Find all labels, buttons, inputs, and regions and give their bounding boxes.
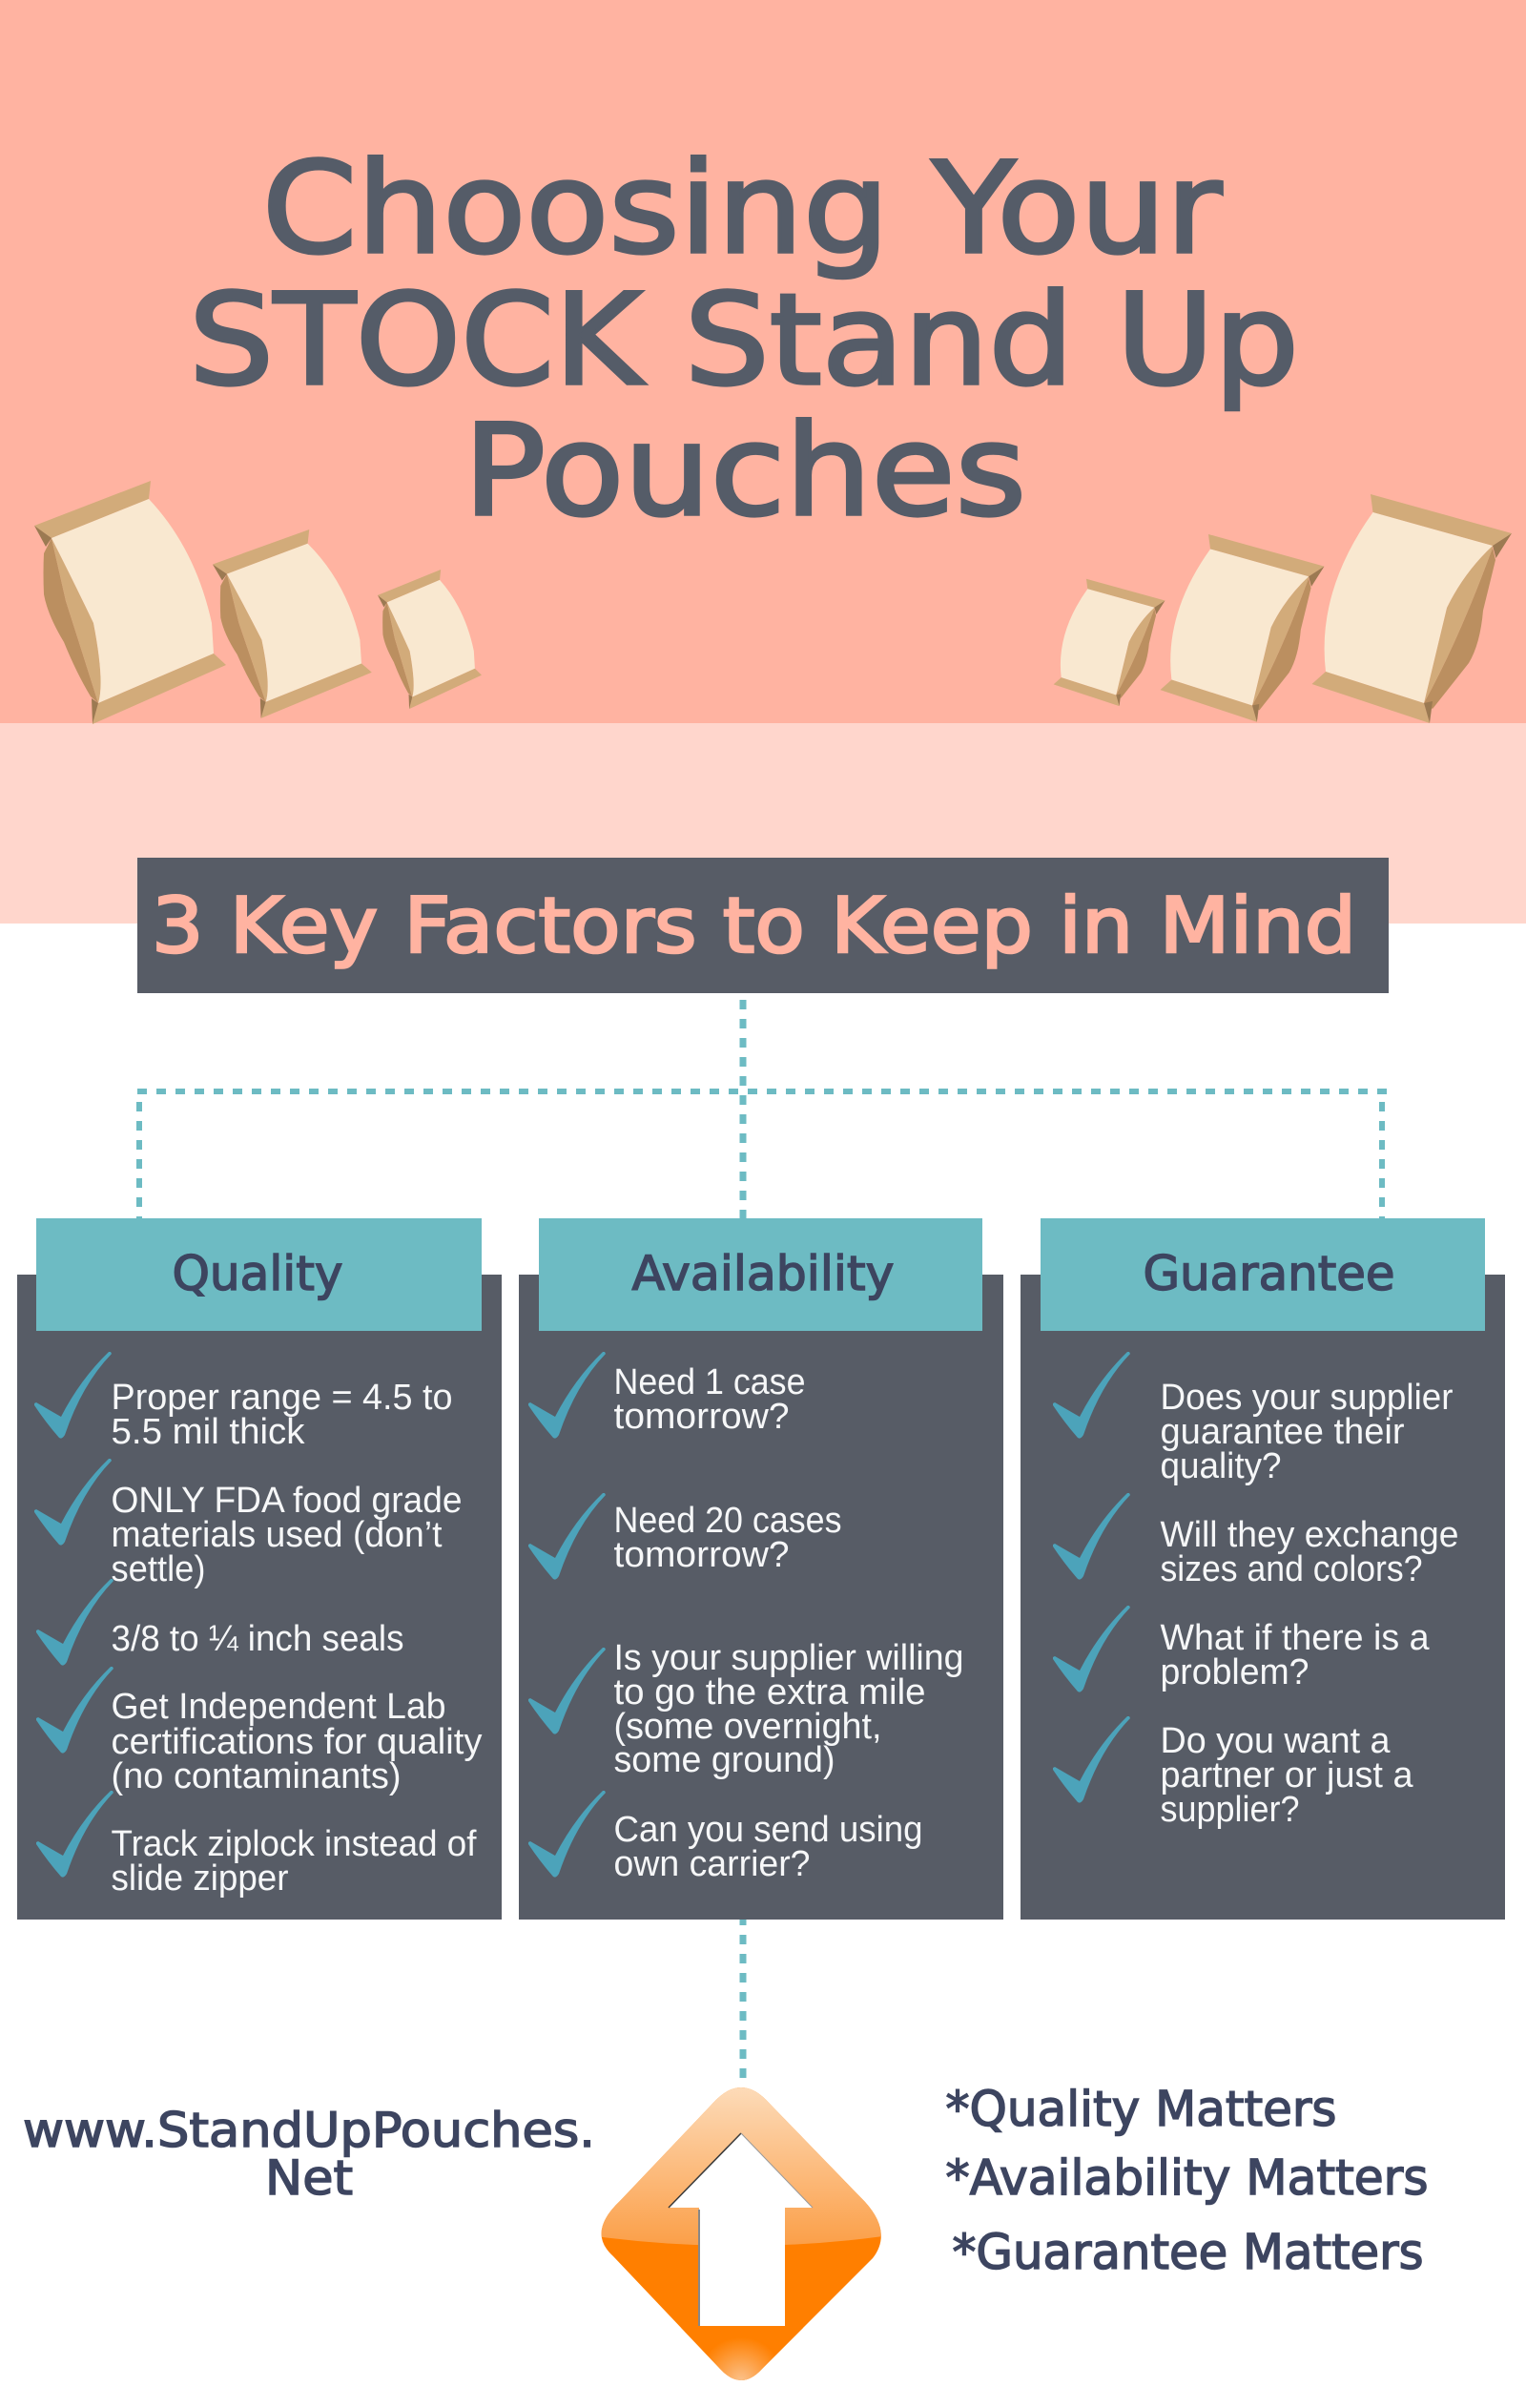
title [189,135,1299,545]
guarantee list text: Will they exchange [1160,1515,1459,1555]
availability checkmarks [528,1352,606,1878]
quality header: Quality [172,1246,343,1301]
availability list text: own carrier? [614,1844,811,1884]
guarantee header: Guarantee [1143,1246,1394,1301]
quality list text: materials used (don’t [111,1515,443,1555]
availability list text [614,1362,963,1884]
availability header: Availability [631,1246,895,1301]
quality list text: 3/8 to ¼ inch seals [111,1619,404,1659]
quality list text: Get Independent Lab [111,1687,446,1727]
availability list text: Need 20 cases [614,1501,841,1541]
icon: right pouches [1054,494,1512,723]
matters list: *Guarantee Matters [952,2225,1423,2281]
guarantee list text: partner or just a [1160,1755,1413,1796]
guarantee header [1041,1218,1485,1331]
matters list [946,2082,1429,2281]
quality header [36,1218,482,1331]
guarantee list text [1160,1378,1459,1830]
quality list text: Track ziplock instead of [111,1824,477,1864]
availability list text: to go the extra mile [614,1672,925,1713]
website url [23,2103,595,2206]
quality list text: 5.5 mil thick [111,1412,305,1452]
section heading: 3 Key Factors to Keep in Mind [152,882,1356,970]
title: Choosing Your [262,135,1223,282]
quality checkmarks [34,1352,113,1878]
matters list: *Availability Matters [946,2150,1429,2207]
availability list text: Can you send using [614,1810,923,1850]
guarantee list text: What if there is a [1160,1618,1430,1658]
guarantee list text: quality? [1160,1446,1282,1486]
section heading [137,858,1389,993]
availability list text: tomorrow? [614,1397,790,1437]
quality list text: Proper range = 4.5 to [111,1378,452,1418]
guarantee checkmarks [1053,1352,1130,1803]
availability header [539,1218,982,1331]
panel: availability [519,1218,1003,1920]
availability list text: Is your supplier willing [614,1638,963,1678]
guarantee list text: Do you want a [1160,1721,1391,1761]
availability list text: Need 1 case [614,1362,805,1402]
header background band [0,0,1526,723]
title: STOCK Stand Up [189,267,1299,414]
light pink band [0,723,1526,924]
availability list text: tomorrow? [614,1535,790,1575]
guarantee list text: guarantee their [1160,1412,1405,1452]
quality list text: settle) [111,1549,206,1589]
guarantee list text: Does your supplier [1160,1378,1454,1418]
website url: Net [265,2150,353,2206]
icon: left pouches [34,481,482,724]
guarantee list text: problem? [1160,1652,1309,1692]
guarantee list text: sizes and colors? [1160,1549,1423,1589]
guarantee list text: supplier? [1160,1790,1299,1830]
icon: orange up arrow [601,2087,881,2380]
panel: quality [17,1218,502,1920]
panel: guarantee [1021,1218,1505,1920]
quality list text: ONLY FDA food grade [111,1481,462,1521]
title: Pouches [464,398,1026,545]
website url: www.StandUpPouches. [23,2103,595,2158]
quality list text: slide zipper [111,1858,289,1899]
matters list: *Quality Matters [946,2082,1337,2138]
quality list text: (no contaminants) [111,1756,401,1796]
quality list text [111,1378,483,1899]
availability list text: some ground) [614,1740,835,1780]
availability list text: (some overnight, [614,1707,881,1747]
quality list text: certifications for quality [111,1722,483,1762]
dotted connectors [137,1000,1387,2078]
